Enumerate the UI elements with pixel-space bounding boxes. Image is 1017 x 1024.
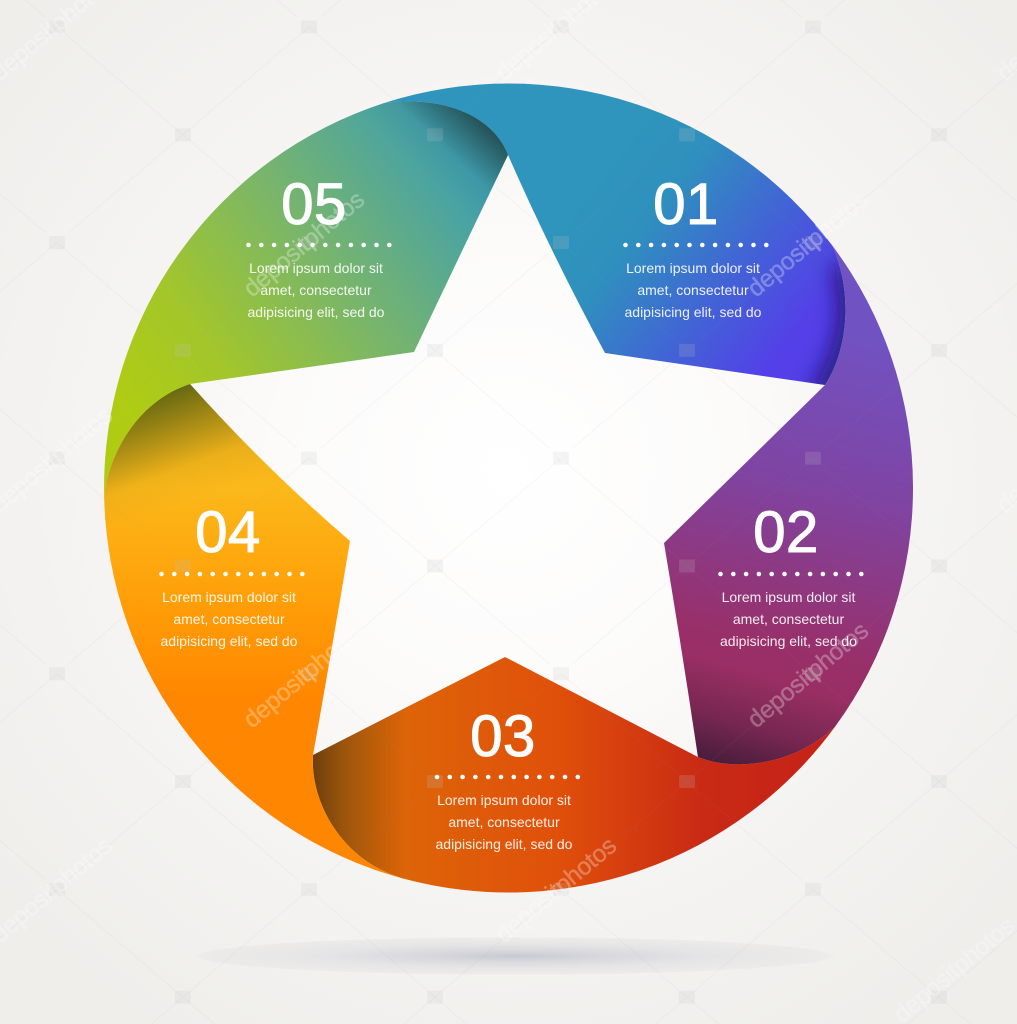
dotted divider 05	[248, 243, 390, 247]
number 03: 03	[470, 704, 536, 769]
description 05: Lorem ipsum dolor sit	[249, 260, 383, 276]
description 01: amet, consectetur	[637, 282, 749, 298]
panel: ring of five ribbons forming a star	[104, 83, 913, 893]
depositphotos watermarks: depositphotos	[239, 617, 370, 734]
depositphotos watermarks: depositphotos	[743, 617, 874, 734]
description 03: adipisicing elit, sed do	[436, 836, 573, 852]
description 05	[248, 260, 385, 320]
number 04: 04	[195, 500, 261, 565]
description 03	[436, 792, 573, 852]
description 04: amet, consectetur	[173, 611, 285, 627]
panel: segment 03 red ribbon	[313, 657, 835, 893]
ground shadow	[193, 937, 837, 975]
text block: step 01	[625, 172, 767, 320]
description 02	[720, 589, 857, 649]
description 01: Lorem ipsum dolor sit	[626, 260, 760, 276]
description 01	[625, 260, 762, 320]
description 02: amet, consectetur	[733, 611, 844, 627]
depositphotos watermarks: depositphotos	[239, 186, 370, 303]
panel: segment 02 purple ribbon	[664, 246, 913, 764]
dotted divider 01	[626, 243, 767, 247]
depositphotos watermarks: depositphotos	[491, 402, 622, 519]
description 04: adipisicing elit, sed do	[161, 633, 298, 649]
description 02: Lorem ipsum dolor sit	[722, 589, 856, 605]
panel: segment 04 orange ribbon	[104, 384, 403, 878]
description 03: Lorem ipsum dolor sit	[437, 792, 571, 808]
text block: step 04	[161, 500, 303, 649]
description 05: amet, consectetur	[260, 282, 372, 298]
depositphotos watermarks: depositphotos	[743, 186, 874, 303]
dotted divider 02	[720, 572, 862, 576]
description 04	[161, 589, 298, 649]
panel: segment 05 green ribbon	[104, 101, 508, 495]
description 05: adipisicing elit, sed do	[248, 304, 385, 320]
text block: step 05	[248, 172, 390, 320]
dotted divider 03	[437, 775, 579, 779]
text block: step 03	[436, 704, 579, 852]
description 04: Lorem ipsum dolor sit	[162, 589, 296, 605]
number 02: 02	[753, 500, 819, 565]
description 01: adipisicing elit, sed do	[625, 304, 762, 320]
text block: step 02	[720, 500, 862, 649]
number 05: 05	[281, 172, 347, 237]
depositphotos watermarks: depositphotos	[491, 832, 622, 949]
panel: segment 01 blue ribbon	[385, 83, 850, 395]
description 03: amet, consectetur	[448, 814, 560, 830]
dotted divider 04	[162, 572, 303, 576]
number 01: 01	[653, 172, 719, 237]
description 02: adipisicing elit, sed do	[720, 633, 857, 649]
